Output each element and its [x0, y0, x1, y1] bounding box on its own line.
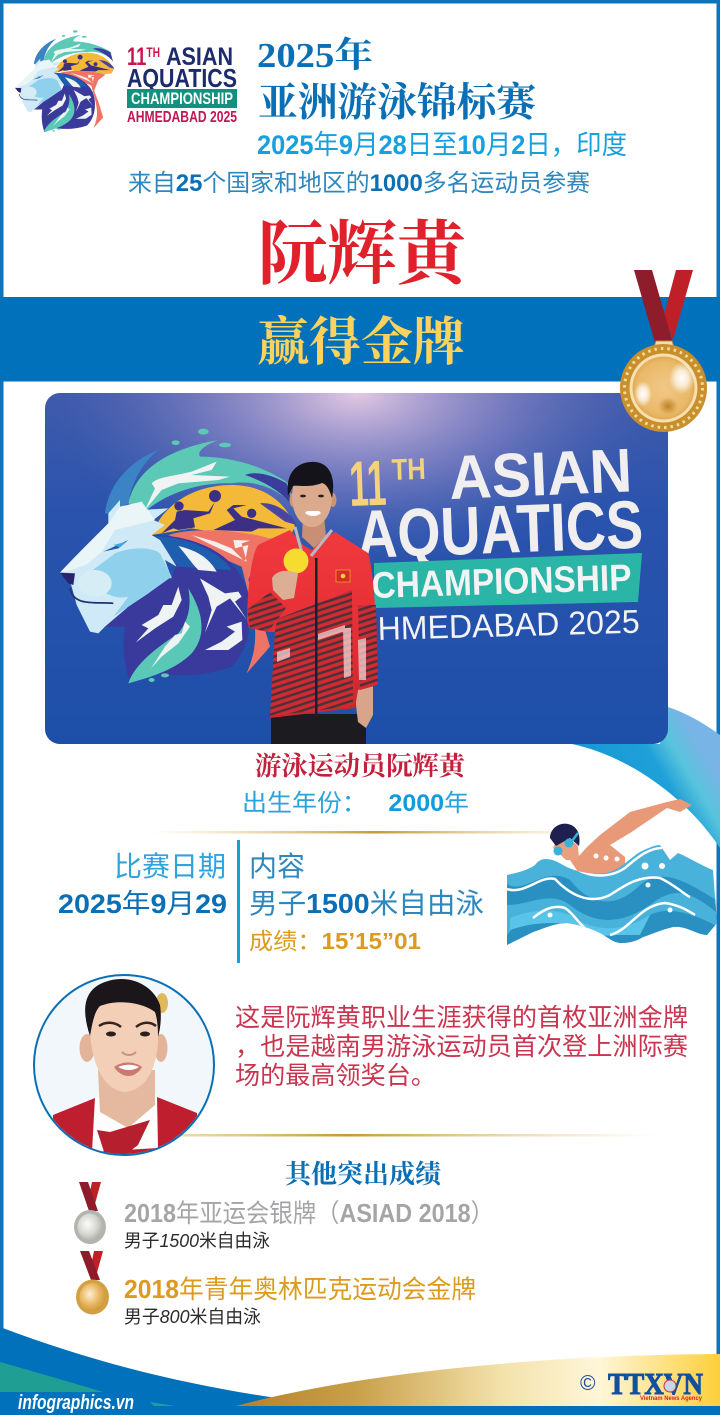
backdrop lion emblem [60, 429, 297, 683]
backdrop lettering: AQUATICS [356, 487, 644, 573]
swimmer illustration [505, 799, 720, 950]
date value: 2025年9月29 [58, 889, 227, 919]
backdrop lettering: TH [391, 453, 426, 487]
athlete name: 阮辉黄 [258, 217, 474, 294]
logo wordmark: ASIAN [166, 43, 233, 71]
portrait [34, 975, 214, 1160]
table: event column [249, 851, 484, 954]
achievement: gold: 2018年青年奥林匹克运动会金牌 [124, 1276, 476, 1304]
logo wordmark: AHMEDABAD 2025 [127, 109, 237, 126]
section heading: 其他突出成绩 [285, 1160, 442, 1189]
medal: silver [74, 1182, 106, 1244]
divider [35, 1134, 660, 1136]
footer band [0, 1327, 720, 1415]
date label: 比赛日期 [114, 851, 226, 882]
logo wordmark: CHAMPIONSHIP [131, 90, 233, 108]
medal: gold [76, 1251, 109, 1314]
caption: athlete name: 游泳运动员阮辉黄 [255, 751, 468, 781]
banner [0, 297, 720, 382]
backdrop lettering: HMEDABAD 2025 [377, 603, 640, 647]
title: championship name: 亚洲游泳锦标赛 [258, 80, 540, 125]
backdrop lettering [351, 448, 642, 640]
mission statement: 场的最高领奖台。 [235, 1062, 436, 1090]
result: 成绩：15’15”01 [249, 928, 421, 954]
table: date column [58, 851, 227, 919]
copyright mark: © [580, 1372, 596, 1395]
vertical divider [237, 840, 240, 963]
divider [150, 831, 600, 834]
event logo [15, 30, 237, 132]
athlete figure [247, 462, 378, 746]
medal: large gold [620, 270, 707, 432]
achievement: silver: 男子1500米自由泳 [124, 1231, 270, 1251]
title: year: 2025年 [257, 36, 373, 75]
banner heading: 赢得金牌 [257, 314, 465, 372]
mission statement: 这是阮辉黄职业生涯获得的首枚亚洲金牌 [235, 1004, 688, 1032]
event value: 男子1500米自由泳 [249, 888, 484, 919]
birth year: 出生年份： 2000年 [242, 790, 469, 817]
achievement: silver: 2018年亚运会银牌（ASIAD 2018） [124, 1200, 494, 1228]
photo: athlete at backdrop [45, 393, 668, 746]
website: infographics.vn [18, 1392, 134, 1414]
backdrop lettering: 11 [348, 447, 387, 520]
swimmer body [570, 799, 692, 875]
logo wordmark: TH [146, 44, 160, 60]
logo wordmark: AQUATICS [127, 63, 237, 93]
logo wordmark: 11 [127, 43, 153, 71]
event label: 内容 [249, 851, 305, 882]
agency logo: Vietnam News Agency [640, 1395, 702, 1402]
participants line: 来自25个国家和地区的1000多名运动员参赛 [128, 170, 590, 197]
event dates and place: 2025年9月28日至10月2日，印度 [257, 130, 627, 160]
agency logo: TTXVN [608, 1366, 703, 1401]
achievement: gold [124, 1276, 476, 1327]
mission statement: ，也是越南男游泳运动员首次登上洲际赛 [235, 1033, 688, 1061]
water waves [507, 845, 717, 945]
backdrop lettering: ASIAN [448, 436, 633, 513]
logo lion [15, 30, 114, 132]
mission statement [235, 1004, 688, 1090]
backdrop lettering: CHAMPIONSHIP [371, 557, 632, 606]
achievement: silver [124, 1200, 494, 1251]
logo wordmark [127, 43, 237, 126]
achievement: gold: 男子800米自由泳 [124, 1307, 261, 1327]
decorative swoosh [572, 707, 720, 848]
